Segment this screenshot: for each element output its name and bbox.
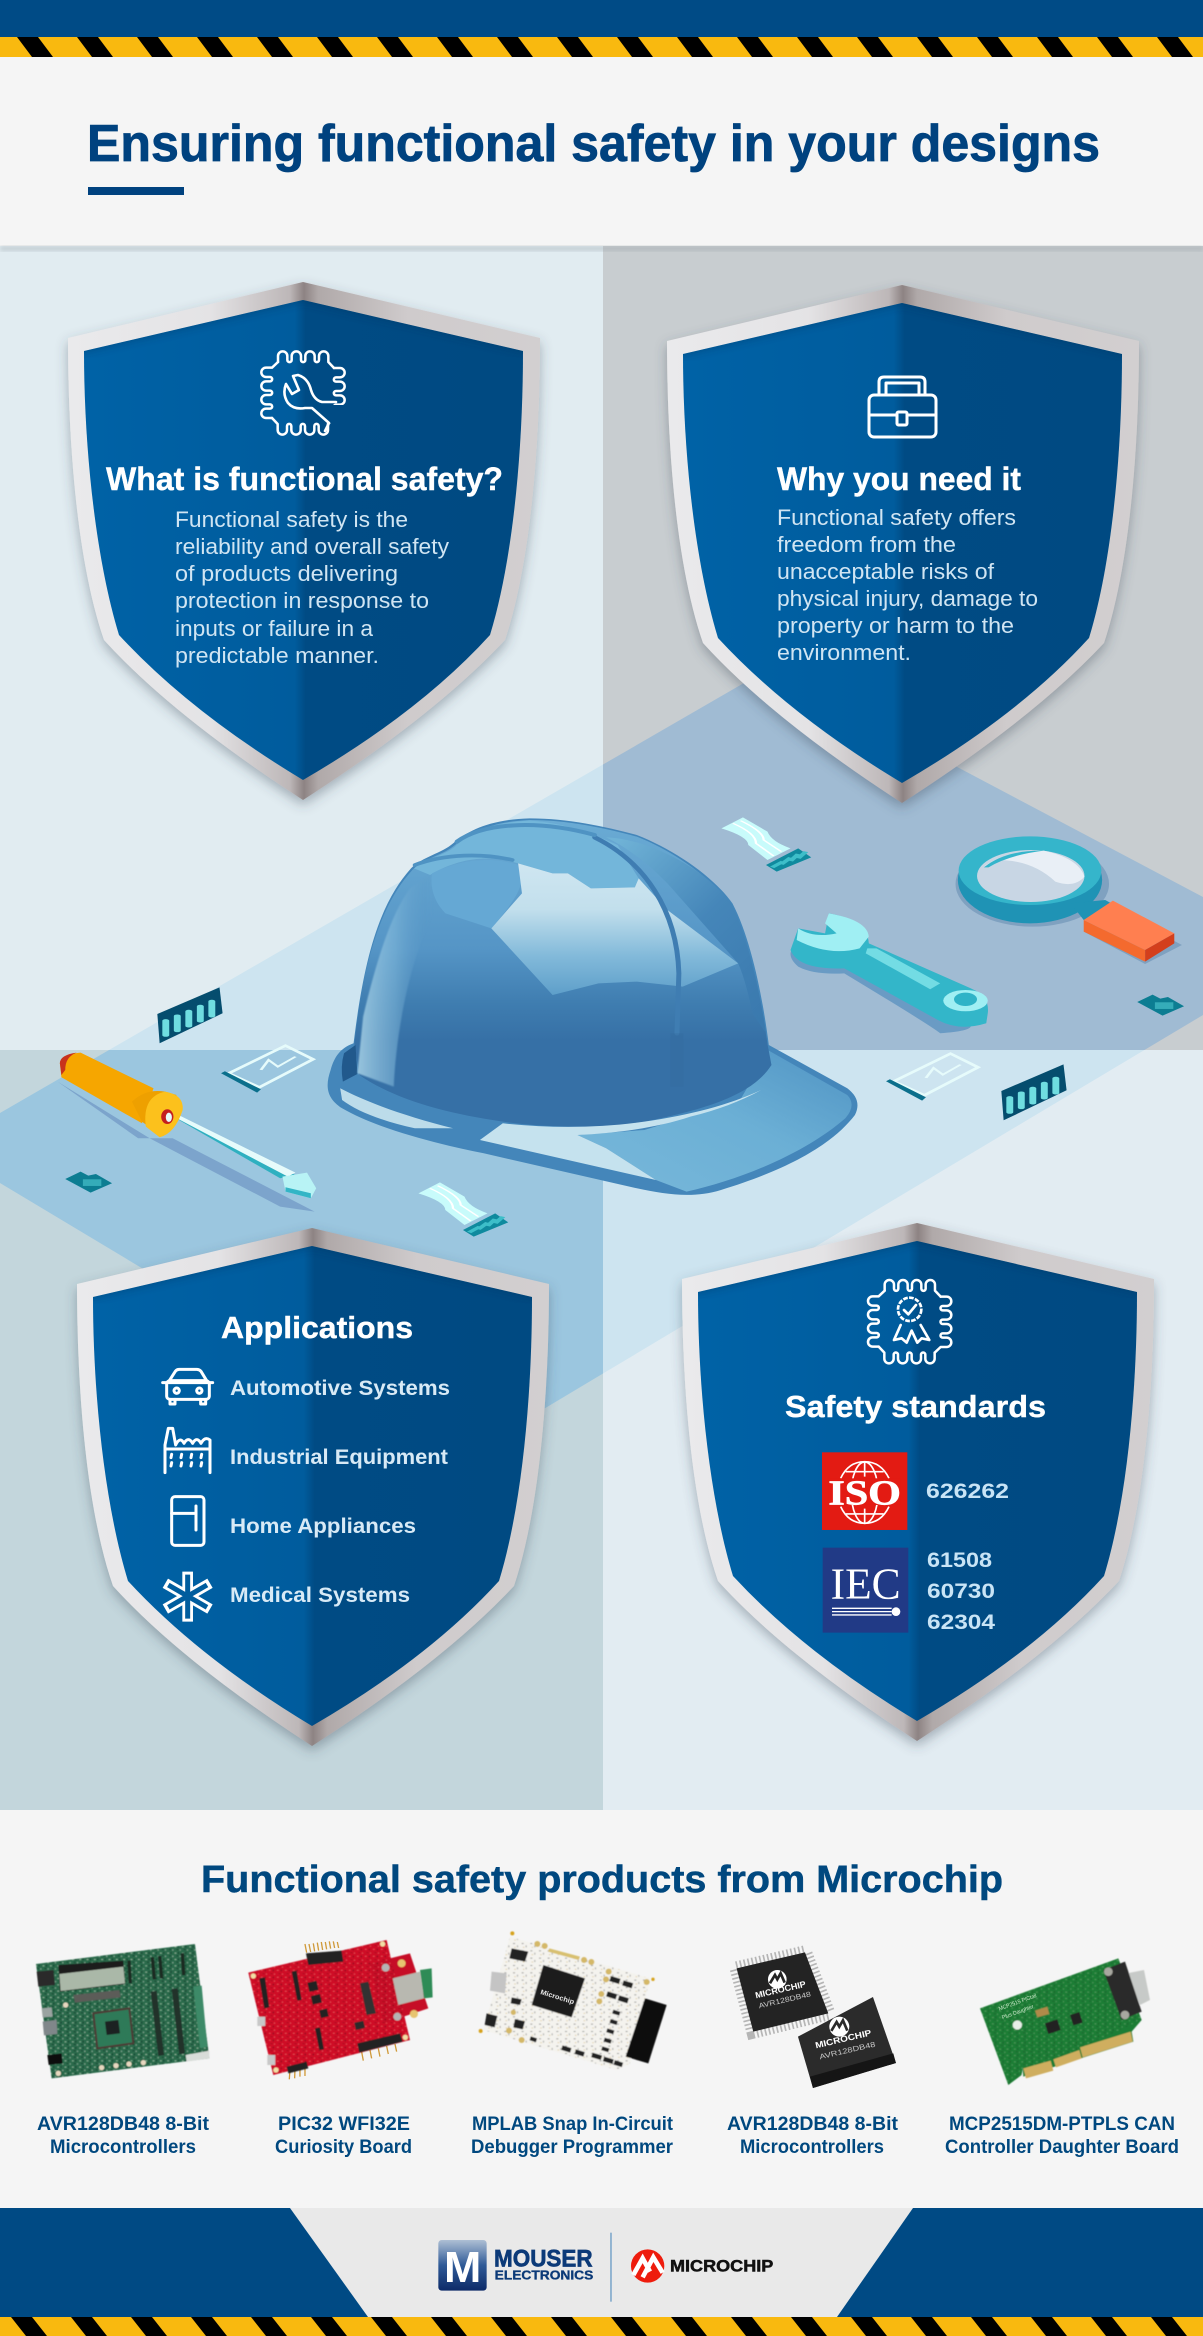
body text: predictable manner. — [175, 643, 379, 668]
icon: screwdriver — [58, 1053, 316, 1212]
upper cap panel — [414, 821, 639, 888]
Mouser logo: MOUSER — [494, 2246, 593, 2273]
icon: magnifying glass — [956, 836, 1182, 964]
body text: inputs or failure in a — [175, 616, 373, 641]
icon: car — [163, 1369, 213, 1404]
body text: freedom from the — [777, 532, 956, 557]
panel: why you need it — [667, 285, 1139, 803]
product: AVR128DB48 chips: AVR128DB48 — [758, 1990, 812, 2010]
standard numbers: 62304 — [927, 1610, 995, 1634]
footer band — [0, 2208, 1203, 2317]
product labels: Microcontrollers — [740, 2137, 884, 2158]
logo divider — [610, 2233, 612, 2302]
body text: Functional safety is the — [175, 507, 408, 532]
product: AVR128DB48 chips: MICROCHIP — [814, 2028, 873, 2050]
product labels: MCP2515DM-PTPLS CAN — [949, 2114, 1175, 2135]
body text: reliability and overall safety — [175, 534, 450, 559]
panel: applications — [77, 1228, 549, 1746]
heading: Safety standards — [785, 1389, 1046, 1424]
top navy band — [0, 0, 1203, 37]
icon: factory — [165, 1428, 210, 1473]
list labels — [230, 1376, 450, 1607]
body text: unacceptable risks of — [777, 559, 995, 584]
dome — [354, 820, 771, 1127]
Microchip logo — [631, 2249, 773, 2283]
title: Ensuring functional safety in your designs — [87, 115, 1100, 173]
icon: wrench — [791, 913, 988, 1033]
footer logos — [438, 2233, 773, 2302]
ridges — [595, 837, 679, 1033]
icon: ribbon cable left — [418, 1182, 508, 1237]
product labels: AVR128DB48 8-Bit — [37, 2114, 210, 2135]
product labels: Curiosity Board — [275, 2137, 412, 2158]
product labels: Microcontrollers — [50, 2137, 196, 2158]
icon: small chip left — [65, 1172, 112, 1193]
body text: protection in response to — [175, 588, 429, 613]
top hazard stripe — [0, 37, 1203, 57]
product: AVR128DB48 chips: AVR128DB48 — [818, 2040, 876, 2061]
product: MCP2515DM-PTPLS daughter board: MCP2515 PICtail — [998, 1993, 1038, 2013]
products section — [0, 1810, 1203, 2208]
background quadrants — [0, 246, 1203, 1810]
Mouser logo: ELECTRONICS — [495, 2268, 593, 2282]
illustration: hard hat — [328, 818, 857, 1195]
IEC logo — [823, 1548, 908, 1633]
dome dark band under rim — [342, 1045, 357, 1082]
heading: What is functional safety? — [106, 461, 503, 497]
product: MPLAB Snap debugger — [479, 1931, 667, 2070]
list labels: Home Appliances — [230, 1514, 416, 1538]
product: AVR128DB48 explorer board — [36, 1944, 209, 2078]
Microchip logo: MICROCHIP — [670, 2257, 773, 2276]
heading: Why you need it — [777, 461, 1021, 497]
body text: property or harm to the — [777, 613, 1014, 638]
body text: of products delivering — [175, 561, 398, 586]
icon: toolbox — [869, 377, 936, 437]
icon: tray frame right — [886, 1054, 978, 1101]
product labels: Debugger Programmer — [471, 2137, 674, 2158]
product labels: MPLAB Snap In-Circuit — [472, 2114, 674, 2135]
body text: Functional safety offers — [777, 505, 1016, 530]
hat silhouette — [328, 818, 857, 1195]
body text: environment. — [777, 640, 911, 665]
body text — [777, 505, 1038, 665]
left reflection — [357, 875, 433, 1087]
Mouser logo — [438, 2240, 593, 2292]
title underline — [88, 187, 184, 195]
heading: Applications — [221, 1310, 413, 1345]
panel: what is functional safety — [68, 282, 540, 800]
icons: applications — [163, 1369, 213, 1622]
icon: fridge — [172, 1497, 204, 1545]
ISO logo — [822, 1452, 907, 1530]
Mouser logo: M — [444, 2244, 481, 2292]
product labels: PIC32 WFI32E — [278, 2114, 410, 2135]
product labels: AVR128DB48 8-Bit — [727, 2114, 899, 2135]
IEC logo: IEC — [831, 1558, 901, 1608]
bottom hazard stripe — [0, 2317, 1203, 2336]
standard numbers: 60730 — [927, 1579, 995, 1603]
header panel — [0, 57, 1203, 246]
rim reflection — [340, 1088, 453, 1128]
product: MCP2515DM-PTPLS daughter board: Plus Daughter — [1001, 2004, 1035, 2021]
reflection — [491, 863, 738, 995]
product labels: Controller Daughter Board — [945, 2137, 1179, 2158]
product: MPLAB Snap debugger: Microchip — [539, 1989, 575, 2006]
product labels — [37, 2114, 1179, 2158]
list labels: Automotive Systems — [230, 1376, 450, 1400]
list labels: Industrial Equipment — [230, 1445, 448, 1469]
product: MCP2515DM-PTPLS daughter board — [980, 1958, 1150, 2085]
icon: medical star — [165, 1572, 210, 1622]
products heading: Functional safety products from Microchip — [201, 1859, 1003, 1901]
body text: physical injury, damage to — [777, 586, 1038, 611]
brim reflection — [480, 1090, 761, 1180]
product: PIC32 WFI32E Curiosity board — [248, 1940, 433, 2079]
standard numbers — [927, 1548, 995, 1634]
icon: small chip right — [1137, 995, 1184, 1016]
standard numbers: 61508 — [927, 1548, 992, 1572]
icon: gear with wrench — [261, 351, 350, 435]
list labels: Medical Systems — [230, 1583, 410, 1607]
icon: ribbon cable right — [721, 817, 811, 872]
icon: memory chip left — [157, 987, 223, 1043]
panel: safety standards — [682, 1223, 1154, 1741]
icon: tray frame left — [221, 1046, 313, 1093]
product: AVR128DB48 chips — [737, 1952, 896, 2088]
standard number: 626262 — [926, 1479, 1009, 1503]
body text — [175, 507, 450, 668]
icon: gear with rosette — [868, 1280, 951, 1363]
icon: memory chip right — [1001, 1064, 1067, 1120]
right panel — [606, 837, 766, 1033]
product: AVR128DB48 chips: MICROCHIP — [754, 1979, 807, 2000]
ISO logo: ISO — [828, 1474, 901, 1512]
brim — [577, 1051, 852, 1192]
